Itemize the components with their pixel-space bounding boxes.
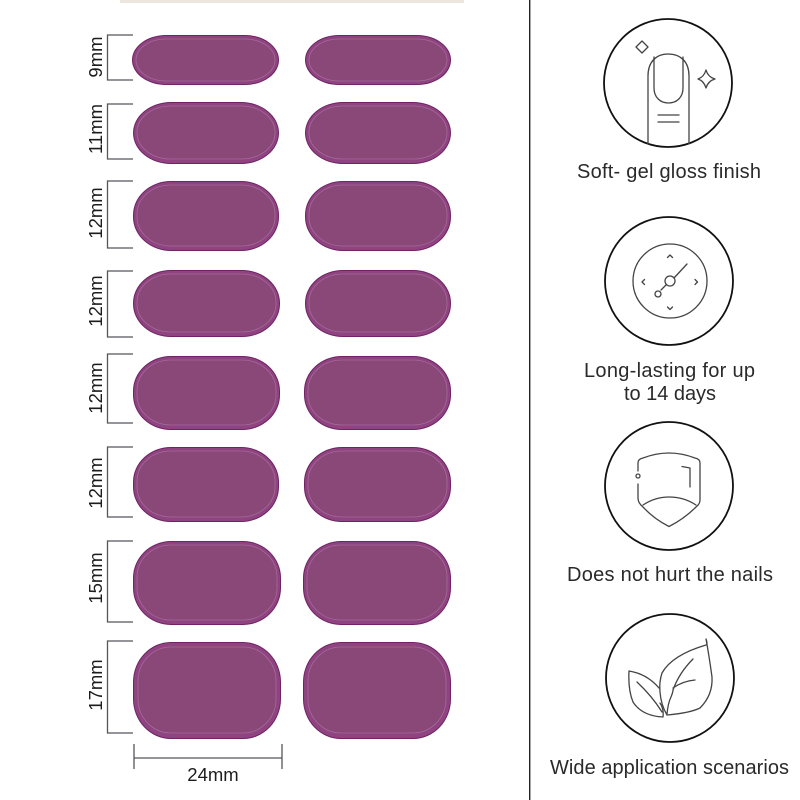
- row 6: 12mm: [85, 447, 451, 522]
- caption: Soft- gel gloss finish: [577, 161, 761, 183]
- caption: to 14 days: [624, 383, 716, 405]
- row 1: 9mm: [85, 35, 451, 85]
- row 8: 17mm: [85, 641, 451, 739]
- icon: leaves: [606, 614, 734, 742]
- caption: Long-lasting for up: [584, 360, 755, 382]
- row 3: 12mm: [85, 181, 451, 251]
- panel: nail strip sizes: [85, 35, 451, 785]
- icon: dial: [605, 217, 733, 345]
- row 6: 12mm: 12mm: [85, 457, 106, 509]
- panel: long-lasting: [584, 217, 755, 405]
- center vertical divider: [529, 0, 530, 800]
- row 2: 11mm: 11mm: [85, 104, 106, 154]
- width dimension: 24mm: [134, 744, 282, 785]
- row 7: 15mm: 15mm: [85, 552, 106, 604]
- row 3: 12mm: 12mm: [85, 187, 106, 239]
- row 8: 17mm: 17mm: [85, 659, 106, 711]
- caption: [584, 360, 755, 405]
- caption: Does not hurt the nails: [567, 564, 773, 586]
- row 7: 15mm: [85, 541, 451, 625]
- row 1: 9mm: 9mm: [85, 36, 106, 78]
- top beige strip: [120, 0, 464, 3]
- panel: does not hurt the nails: [567, 422, 773, 586]
- row 4: 12mm: [85, 270, 451, 337]
- row 4: 12mm: 12mm: [85, 275, 106, 327]
- row 2: 11mm: [85, 102, 451, 164]
- panel: soft-gel gloss finish: [577, 19, 761, 183]
- caption: Wide application scenarios: [550, 757, 789, 779]
- icon: nail shield: [605, 422, 733, 550]
- panel: wide application scenarios: [550, 614, 789, 779]
- width dimension: 24mm: 24mm: [187, 764, 239, 785]
- icon: finger with sparkles: [604, 19, 732, 147]
- row 5: 12mm: [85, 354, 451, 430]
- row 5: 12mm: 12mm: [85, 362, 106, 414]
